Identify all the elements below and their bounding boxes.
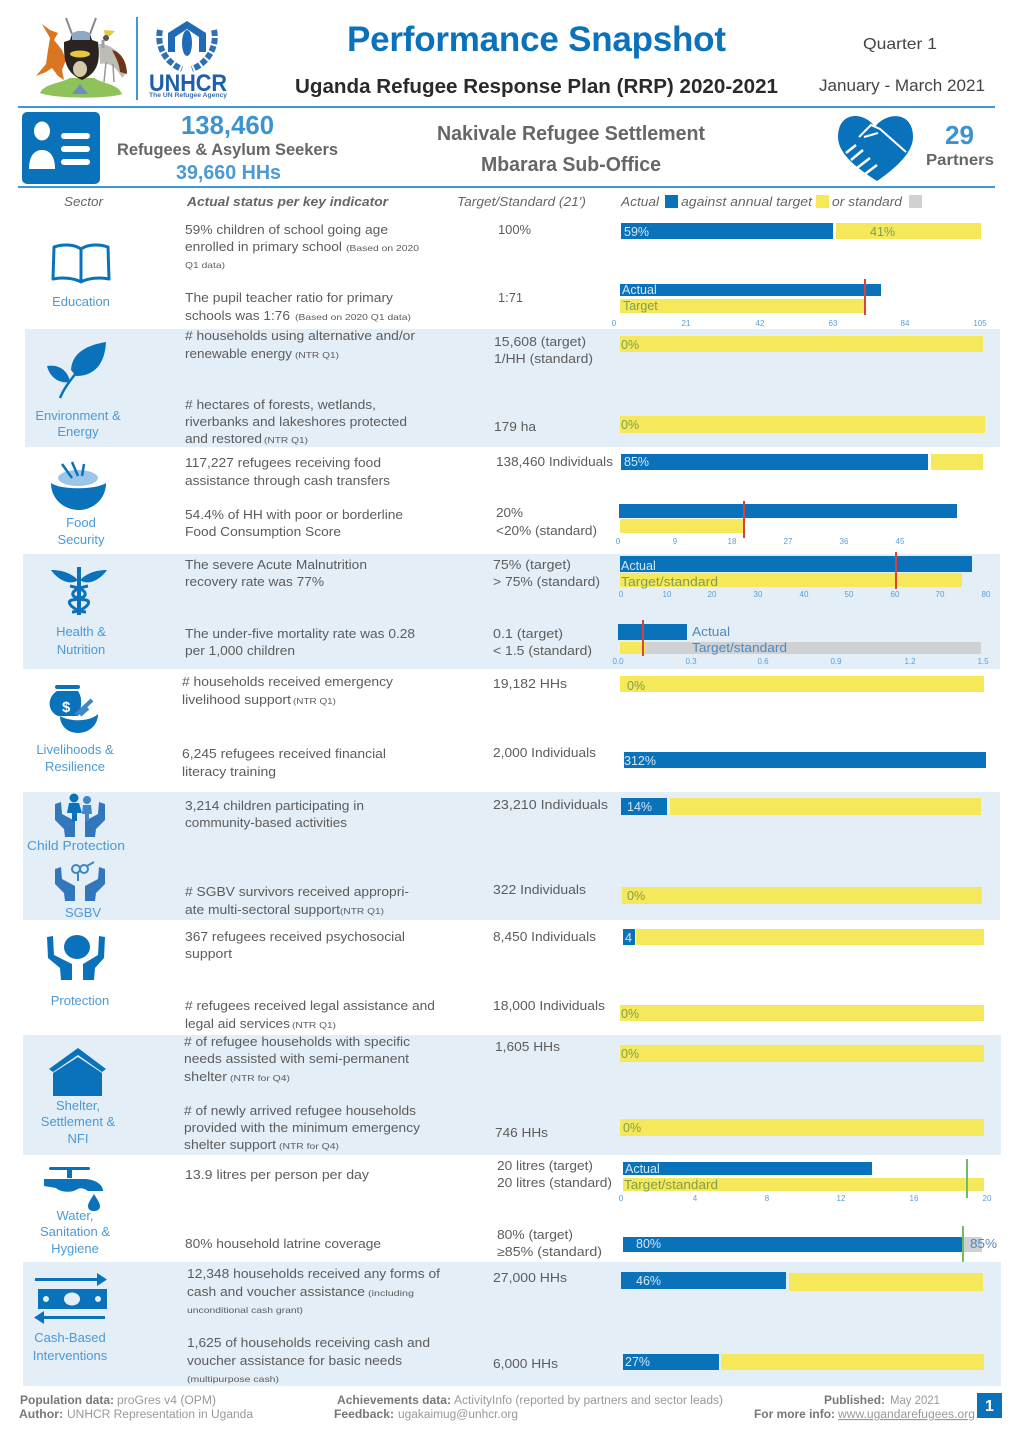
chart: latrine bbox=[623, 1226, 997, 1264]
icon: food bowl bbox=[51, 462, 106, 510]
chart: SAM: 40 bbox=[800, 590, 809, 599]
panel: Cash-Based Interventions bbox=[23, 1262, 1001, 1386]
sector label: Sanitation & bbox=[40, 1224, 110, 1239]
bar: 27%: 27% bbox=[625, 1355, 650, 1369]
sector label bbox=[56, 624, 106, 657]
indicator: cash and voucher: (including bbox=[368, 1288, 414, 1298]
sector label bbox=[33, 1330, 108, 1363]
indicator: SAM: recovery rate was 77% bbox=[185, 575, 324, 589]
bar: 312% bbox=[624, 752, 986, 768]
indicator: SGBV survivors: (NTR Q1) bbox=[340, 906, 384, 916]
partners bbox=[926, 120, 994, 169]
indicator: pupil teacher ratio: (Based on 2020 Q1 data) bbox=[295, 312, 411, 322]
target: emergency livelihood: 19,182 HHs bbox=[493, 677, 567, 691]
indicator: legal aid: (NTR Q1) bbox=[292, 1020, 336, 1030]
panel: Health and Nutrition bbox=[23, 552, 1000, 669]
indicator: hectares: and restored bbox=[185, 432, 262, 446]
indicator: multipurpose cash: 1,625 of households receiving cash and bbox=[187, 1336, 430, 1350]
target: legal aid: 18,000 Individuals bbox=[493, 999, 605, 1013]
indicator: enrolment bbox=[185, 223, 419, 270]
indicator: cash and voucher: unconditional cash grant) bbox=[187, 1305, 303, 1315]
indicator: legal aid: # refugees received legal assistance and bbox=[185, 999, 435, 1013]
sector label: Water, bbox=[56, 1208, 94, 1223]
target: cash and voucher: 27,000 HHs bbox=[493, 1271, 567, 1285]
chart: pupil teacher ratio: Target bbox=[623, 299, 658, 313]
panel: Food Security bbox=[51, 454, 983, 547]
footer: data sources: Author: bbox=[19, 1409, 63, 1421]
chart: FCS: 9 bbox=[673, 537, 678, 546]
target: emergency shelter: 746 HHs bbox=[495, 1126, 548, 1140]
table header and legend: or standard bbox=[832, 194, 903, 209]
target: latrine: 80% (target) bbox=[497, 1228, 573, 1242]
chart: pupil teacher ratio: 63 bbox=[829, 319, 838, 328]
indicator: emergency shelter bbox=[184, 1104, 421, 1152]
icon: person ID card bbox=[22, 112, 100, 184]
chart: pupil teacher ratio: 84 bbox=[901, 319, 910, 328]
sector label bbox=[40, 1208, 110, 1256]
target: renewable energy: 1/HH (standard) bbox=[494, 352, 593, 366]
header bbox=[18, 17, 995, 188]
indicator: legal aid bbox=[185, 999, 435, 1031]
chart: FCS: 18 bbox=[728, 537, 737, 546]
settlement name: Nakivale Refugee Settlement bbox=[437, 123, 705, 145]
chart: mortality: 1.2 bbox=[904, 657, 916, 666]
quarter: Quarter 1 bbox=[863, 36, 937, 53]
indicator: child participation: community-based activities bbox=[185, 816, 347, 830]
sector label bbox=[36, 742, 114, 774]
indicator: enrolment: (Based on 2020 bbox=[346, 243, 419, 253]
sector label bbox=[58, 515, 105, 547]
indicator: food cash bbox=[185, 456, 390, 488]
target: hectares: 179 ha bbox=[494, 420, 536, 434]
target: SGBV survivors: 322 Individuals bbox=[493, 883, 586, 897]
indicator: cash and voucher: 12,348 households received any forms of bbox=[187, 1267, 441, 1281]
logo: UNHCR: The UN Refugee Agency bbox=[149, 93, 228, 99]
footer: data sources: UNHCR Representation in Uganda bbox=[67, 1409, 254, 1421]
chart: litres: 20 bbox=[983, 1194, 992, 1203]
table header and legend: Target/Standard (21') bbox=[457, 194, 586, 209]
sector label: Settlement & bbox=[41, 1114, 116, 1129]
indicator: renewable energy: # households using alternative and/or bbox=[185, 329, 415, 343]
indicator: multipurpose cash: voucher assistance for basic needs bbox=[187, 1354, 402, 1368]
chart: mortality: Target/standard bbox=[692, 641, 787, 655]
indicator: under-five mortality: per 1,000 children bbox=[185, 644, 295, 658]
target: semi-permanent shelter: 1,605 HHs bbox=[495, 1040, 560, 1054]
indicator: renewable energy: renewable energy bbox=[185, 347, 293, 361]
chart: litres bbox=[619, 1159, 992, 1203]
icon: hands with circle bbox=[47, 935, 105, 980]
indicator: semi-permanent shelter: needs assisted with semi-permanent bbox=[184, 1052, 410, 1066]
chart: litres: 0 bbox=[619, 1194, 624, 1203]
chart: mortality: 0.0 bbox=[612, 657, 624, 666]
bar: 0% bbox=[620, 1005, 984, 1021]
indicator: enrolment: enrolled in primary school bbox=[185, 240, 342, 254]
indicator: hectares: riverbanks and lakeshores protected bbox=[185, 415, 407, 429]
chart: litres: 12 bbox=[837, 1194, 846, 1203]
icon: house bbox=[49, 1048, 106, 1096]
bar: 0%: 0% bbox=[621, 338, 639, 352]
sector label: Food bbox=[66, 515, 96, 530]
indicator: multipurpose cash: (multipurpose cash) bbox=[187, 1374, 279, 1384]
chart: pupil teacher ratio: 0 bbox=[612, 319, 617, 328]
chart: litres: Actual bbox=[625, 1162, 660, 1176]
target: enrolment: 100% bbox=[498, 223, 531, 237]
icon: hands with children bbox=[55, 794, 105, 837]
indicator: SGBV survivors: ate multi-sectoral support bbox=[185, 903, 341, 917]
date range: January - March 2021 bbox=[819, 76, 985, 95]
target: financial literacy: 2,000 Individuals bbox=[493, 746, 596, 760]
indicator: emergency livelihood: (NTR Q1) bbox=[293, 696, 336, 706]
bar: 0% bbox=[620, 1045, 984, 1062]
target: renewable energy: 15,608 (target) bbox=[494, 335, 586, 349]
divider bbox=[136, 17, 138, 100]
indicator: cash and voucher: cash and voucher assistance bbox=[187, 1285, 365, 1299]
indicator: semi-permanent shelter: (NTR for Q4) bbox=[230, 1073, 290, 1083]
partners: 29 bbox=[945, 120, 974, 150]
chart: SAM: Actual bbox=[621, 559, 656, 573]
panel: Livelihoods and Resilience bbox=[36, 675, 986, 779]
bar: 0% bbox=[620, 416, 985, 433]
bar: 0%: 0% bbox=[621, 1007, 639, 1021]
sector label: Cash-Based bbox=[34, 1330, 106, 1345]
table header and legend bbox=[64, 194, 922, 209]
sector label: Energy bbox=[57, 424, 99, 439]
panel: Shelter, Settlement and NFI bbox=[23, 1035, 1001, 1155]
page number bbox=[977, 1393, 1002, 1418]
indicator: emergency livelihood: livelihood support bbox=[182, 693, 292, 707]
bar: 0%: 0% bbox=[627, 889, 645, 903]
panel: Education bbox=[52, 223, 987, 328]
bar: 59%: 41% bbox=[870, 225, 895, 239]
chart: SAM: 20 bbox=[708, 590, 717, 599]
indicator: semi-permanent shelter: # of refugee households with specific bbox=[184, 1035, 410, 1049]
sector label: Livelihoods & bbox=[36, 742, 114, 757]
sector label: Resilience bbox=[45, 759, 105, 774]
icon: caduceus bbox=[51, 567, 107, 615]
indicator: emergency livelihood bbox=[182, 675, 394, 707]
bar: 0%: 0% bbox=[623, 1121, 641, 1135]
indicator: legal aid: legal aid services bbox=[185, 1017, 290, 1031]
footer bbox=[19, 1393, 1002, 1421]
sector label bbox=[35, 408, 121, 439]
sector label: Security bbox=[58, 532, 105, 547]
indicator: litres per person: 13.9 litres per person per day bbox=[185, 1168, 370, 1182]
chart: SAM: 60 bbox=[891, 590, 900, 599]
sector label: Protection bbox=[51, 993, 109, 1008]
icon: money bag and bowl: $ bbox=[62, 699, 71, 716]
indicator: renewable energy bbox=[185, 329, 415, 361]
indicator: cash and voucher bbox=[187, 1267, 441, 1315]
bar: 85% bbox=[621, 454, 983, 470]
target: SAM: > 75% (standard) bbox=[493, 575, 600, 589]
chart: mortality: 0.9 bbox=[830, 657, 842, 666]
indicator: FCS: Food Consumption Score bbox=[185, 525, 341, 539]
target: multipurpose cash: 6,000 HHs bbox=[493, 1357, 558, 1371]
indicator: renewable energy: (NTR Q1) bbox=[295, 350, 339, 360]
indicator: child participation: 3,214 children participating in bbox=[185, 799, 364, 813]
indicator: emergency shelter: shelter support bbox=[184, 1138, 277, 1152]
page number: 1 bbox=[985, 1398, 994, 1415]
chart: FCS: 36 bbox=[840, 537, 849, 546]
bar: 0%: 0% bbox=[621, 1047, 639, 1061]
footer: achievements and feedback bbox=[334, 1395, 723, 1421]
population figures: 138,460 bbox=[181, 110, 274, 140]
icon: open book bbox=[53, 245, 109, 282]
chart: mortality: Actual bbox=[692, 625, 730, 639]
bar: 4% bbox=[623, 929, 984, 945]
title: Performance Snapshot bbox=[347, 20, 726, 59]
chart: mortality: 0.6 bbox=[757, 657, 769, 666]
bar: 0%: 0% bbox=[627, 679, 645, 693]
sector label: Health & bbox=[56, 624, 106, 639]
indicator: pupil teacher ratio: The pupil teacher ratio for primary bbox=[185, 291, 394, 305]
indicator: enrolment: Q1 data) bbox=[185, 260, 225, 270]
chart: litres: 4 bbox=[693, 1194, 698, 1203]
indicator: psychosocial: support bbox=[185, 947, 233, 961]
indicator: under-five mortality bbox=[185, 627, 415, 658]
chart: SAM: 30 bbox=[754, 590, 763, 599]
bar: 85%: 85% bbox=[624, 455, 649, 469]
indicator: emergency shelter: provided with the minimum emergency bbox=[184, 1121, 421, 1135]
chart: pupil teacher ratio bbox=[612, 279, 987, 328]
sector label: Shelter, bbox=[56, 1098, 100, 1113]
target: latrine: ≥85% (standard) bbox=[497, 1245, 602, 1259]
sector label: SGBV: SGBV bbox=[65, 905, 101, 920]
chart: mortality bbox=[612, 620, 989, 666]
target: SAM bbox=[493, 558, 600, 589]
icon: handshake heart bbox=[838, 116, 913, 181]
chart: mortality: 0.3 bbox=[685, 657, 697, 666]
sector label: Nutrition bbox=[57, 642, 105, 657]
population figures bbox=[117, 110, 338, 184]
indicator: emergency livelihood: # households received emergency bbox=[182, 675, 394, 689]
indicator: financial literacy: literacy training bbox=[182, 765, 276, 779]
chart: latrine: 85% bbox=[970, 1237, 997, 1251]
target: child participation: 23,210 Individuals bbox=[493, 798, 608, 812]
indicator: psychosocial bbox=[185, 930, 405, 961]
footer: achievements and feedback: Achievements data: bbox=[337, 1395, 451, 1407]
footer: published and info: For more info: bbox=[754, 1409, 835, 1421]
chart: pupil teacher ratio: Actual bbox=[622, 283, 657, 297]
indicator: FCS bbox=[185, 508, 403, 539]
target: litres: 20 litres (target) bbox=[497, 1159, 593, 1173]
table header and legend: against annual target bbox=[681, 194, 813, 209]
icon: money bag and bowl bbox=[50, 685, 98, 733]
indicator: SAM: The severe Acute Malnutrition bbox=[185, 558, 367, 572]
chart: pupil teacher ratio: 105 bbox=[973, 319, 987, 328]
rule bottom bbox=[18, 186, 995, 188]
footer: achievements and feedback: ugakaimug@unhcr.org bbox=[398, 1409, 518, 1421]
sector label: Education bbox=[52, 294, 110, 309]
target: mortality: < 1.5 (standard) bbox=[493, 644, 592, 658]
population figures: Refugees & Asylum Seekers bbox=[117, 140, 338, 159]
chart: mortality: 1.5 bbox=[977, 657, 989, 666]
chart: SAM: 70 bbox=[936, 590, 945, 599]
sector label: Hygiene bbox=[51, 1241, 99, 1256]
indicator: multipurpose cash bbox=[187, 1336, 430, 1384]
footer: achievements and feedback: Feedback: bbox=[334, 1409, 394, 1421]
table header and legend: Sector bbox=[64, 194, 104, 209]
sector label: NFI bbox=[68, 1131, 88, 1146]
bar: 4%: 4 bbox=[625, 931, 632, 945]
population figures: 39,660 HHs bbox=[176, 162, 281, 184]
footer: published and info bbox=[754, 1395, 975, 1421]
chart: FCS: 0 bbox=[616, 537, 621, 546]
chart: litres: 8 bbox=[765, 1194, 770, 1203]
icon: leaves bbox=[47, 342, 106, 398]
bar: 14% bbox=[621, 798, 981, 815]
indicator: food cash: 117,227 refugees receiving food bbox=[185, 456, 381, 470]
chart: litres: 16 bbox=[910, 1194, 919, 1203]
target: renewable energy bbox=[494, 335, 593, 366]
logo: UNHCR bbox=[149, 21, 228, 99]
footer: data sources: Population data: bbox=[20, 1395, 114, 1407]
target: SAM: 75% (target) bbox=[493, 558, 571, 572]
bar: 46% bbox=[621, 1272, 983, 1291]
target: litres: 20 litres (standard) bbox=[497, 1176, 612, 1190]
indicator: hectares: (NTR Q1) bbox=[264, 435, 308, 445]
table header and legend: Actual bbox=[620, 194, 660, 209]
target: mortality bbox=[493, 627, 592, 658]
chart: SAM: 50 bbox=[845, 590, 854, 599]
target: pupil teacher ratio: 1:71 bbox=[498, 291, 523, 305]
sector label: Interventions bbox=[33, 1348, 108, 1363]
target: food cash: 138,460 Individuals bbox=[496, 455, 613, 469]
sector label: Environment & bbox=[35, 408, 121, 423]
indicator: psychosocial: 367 refugees received psychosocial bbox=[185, 930, 405, 944]
bar: 59%: 59% bbox=[624, 225, 649, 239]
rule top bbox=[18, 106, 995, 108]
settlement name: Mbarara Sub-Office bbox=[481, 154, 661, 176]
sector label bbox=[41, 1098, 116, 1146]
table header and legend: Actual status per key indicator bbox=[186, 194, 389, 209]
icon: hands with gender symbols bbox=[55, 862, 105, 901]
icon: banknote with arrows bbox=[34, 1273, 107, 1324]
indicator: financial literacy bbox=[182, 747, 386, 779]
indicator: hectares bbox=[185, 398, 407, 446]
footer: published and info: May 2021 bbox=[890, 1395, 940, 1407]
settlement name bbox=[437, 123, 705, 176]
indicator: pupil teacher ratio bbox=[185, 291, 411, 323]
indicator: enrolment: 59% children of school going age bbox=[185, 223, 388, 237]
bar: 0% bbox=[622, 887, 982, 904]
bar: 59% bbox=[621, 223, 981, 239]
indicator: semi-permanent shelter bbox=[184, 1035, 410, 1084]
indicator: SGBV survivors: # SGBV survivors received appropri- bbox=[185, 885, 409, 899]
indicator: SGBV survivors bbox=[185, 885, 409, 917]
indicator: FCS: 54.4% of HH with poor or borderline bbox=[185, 508, 403, 522]
chart: FCS: 27 bbox=[784, 537, 793, 546]
indicator: pupil teacher ratio: schools was 1:76 bbox=[185, 309, 290, 323]
footer: achievements and feedback: ActivityInfo (reported by partners and sector leads) bbox=[454, 1395, 723, 1407]
chart: pupil teacher ratio: 21 bbox=[682, 319, 691, 328]
partners: Partners bbox=[926, 152, 994, 169]
indicator: emergency shelter: # of newly arrived refugee households bbox=[184, 1104, 416, 1118]
bar: 46%: 46% bbox=[636, 1274, 661, 1288]
target: mortality: 0.1 (target) bbox=[493, 627, 563, 641]
panel: Water, Sanitation and Hygiene bbox=[40, 1159, 997, 1264]
logo: UNHCR: UNHCR bbox=[149, 70, 227, 97]
chart: SAM: 10 bbox=[663, 590, 672, 599]
panel: Protection bbox=[47, 929, 984, 1031]
bar: 0% bbox=[620, 336, 983, 352]
target: litres bbox=[497, 1159, 612, 1190]
chart: SAM: Target/standard bbox=[621, 575, 718, 589]
indicator: latrine coverage: 80% household latrine coverage bbox=[185, 1237, 381, 1251]
chart: FCS bbox=[616, 501, 957, 546]
footer: published and info: Published: bbox=[824, 1395, 885, 1407]
indicator: child participation bbox=[185, 799, 364, 830]
bar: 0% bbox=[620, 676, 984, 693]
panel: Environment and Energy bbox=[25, 329, 1000, 447]
target: FCS: 20% bbox=[496, 506, 523, 520]
indicator: semi-permanent shelter: shelter bbox=[184, 1070, 227, 1084]
target: FCS bbox=[496, 506, 597, 538]
bar: 312%: 312% bbox=[624, 754, 656, 768]
indicator: financial literacy: 6,245 refugees received financial bbox=[182, 747, 386, 761]
subtitle: Uganda Refugee Response Plan (RRP) 2020-2021 bbox=[295, 76, 778, 98]
indicator: food cash: assistance through cash transfers bbox=[185, 474, 390, 488]
logo: Uganda coat of arms bbox=[36, 18, 127, 98]
chart: pupil teacher ratio: 42 bbox=[756, 319, 765, 328]
indicator: under-five mortality: The under-five mortality rate was 0.28 bbox=[185, 627, 415, 641]
sector label: Child Protection: Child Protection bbox=[27, 838, 125, 853]
footer: data sources bbox=[19, 1395, 254, 1421]
panel: Child Protection and SGBV bbox=[23, 792, 1000, 920]
indicator: hectares: # hectares of forests, wetlands, bbox=[185, 398, 376, 412]
bar: 0% bbox=[620, 1119, 984, 1136]
bar: 14%: 14% bbox=[627, 800, 652, 814]
bar: 27% bbox=[623, 1354, 984, 1370]
footer: published and info: www.ugandarefugees.org bbox=[837, 1409, 975, 1421]
target: latrine bbox=[497, 1228, 602, 1259]
indicator: SAM bbox=[185, 558, 367, 589]
chart: SAM: 80 bbox=[982, 590, 991, 599]
icon: tap with drop bbox=[44, 1167, 103, 1211]
target: FCS: <20% (standard) bbox=[496, 524, 597, 538]
target: psychosocial: 8,450 Individuals bbox=[493, 930, 596, 944]
footer: data sources: proGres v4 (OPM) bbox=[117, 1395, 216, 1407]
chart: SAM: 0 bbox=[619, 590, 624, 599]
chart: litres: Target/standard bbox=[624, 1178, 718, 1192]
indicator: emergency shelter: (NTR for Q4) bbox=[279, 1141, 339, 1151]
chart: FCS: 45 bbox=[896, 537, 905, 546]
chart: SAM bbox=[619, 552, 991, 599]
bar: 0%: 0% bbox=[621, 418, 639, 432]
chart: latrine: 80% bbox=[636, 1237, 661, 1251]
